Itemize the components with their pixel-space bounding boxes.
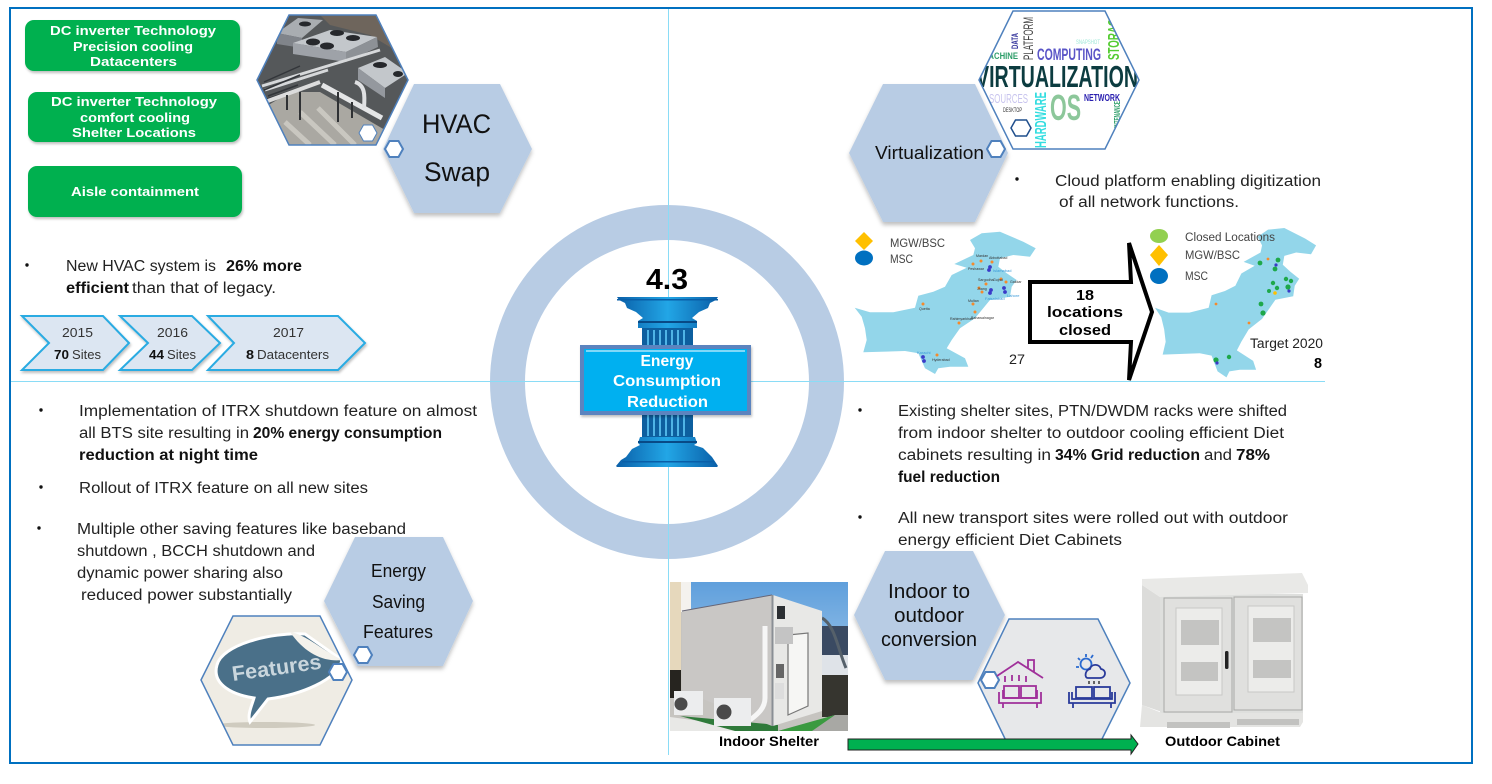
target 2020 count: Target 2020 (1250, 336, 1323, 351)
hexagon: Energy Saving Features: Saving (372, 592, 425, 612)
pillar label box: Reduction (627, 394, 708, 411)
hexagon: Indoor to outdoor conversion (854, 551, 1005, 680)
map: current 27 locations: Jhang (977, 287, 987, 291)
hexagon: Indoor to outdoor conversion: Indoor to (888, 581, 970, 603)
photo: indoor shelter (670, 582, 848, 731)
hexagon: Indoor to outdoor conversion: outdoor (894, 605, 964, 627)
chevron 2016: 2016 (157, 325, 188, 340)
panel: virtualization (849, 11, 1323, 380)
arrow: 18 locations closed (1030, 243, 1152, 380)
bullet: HVAC efficiency (25, 258, 302, 297)
word cloud hexagon: MACHINE (982, 51, 1018, 61)
legend: left map: MGW/BSC (890, 236, 945, 250)
map: current 27 locations (855, 232, 1036, 374)
map: current 27 locations: Bahawalnagar (971, 316, 995, 320)
map: current 27 locations: Mardan (976, 254, 988, 258)
bullet list: ITRX features: reduction at night time (79, 447, 258, 464)
pillar label box: Consumption (613, 373, 721, 390)
pillar label box: Energy (640, 353, 694, 370)
chevron 2015: Sites (72, 347, 101, 362)
map: current 27 locations: Multan (968, 299, 979, 303)
bullet list: ITRX features: Multiple other saving features like baseband (77, 521, 406, 538)
hexagon: Virtualization (849, 84, 1008, 222)
green box: precision cooling: Precision cooling (73, 39, 193, 54)
word cloud hexagon: DATA (1010, 33, 1020, 49)
bullet list: ITRX features: Rollout of ITRX feature on all new sites (79, 480, 368, 497)
panel: indoor to outdoor conversion (670, 403, 1308, 754)
green box: precision cooling: Datacenters (90, 54, 177, 69)
map: current 27 locations: Abbottabad (989, 256, 1007, 260)
map: target 8 locations (1155, 228, 1316, 377)
bullet list: ITRX features: shutdown , BCCH shutdown and (77, 543, 315, 560)
green box: comfort cooling (28, 92, 240, 142)
arrow: shelter to cabinet (848, 735, 1138, 754)
target 2020 count: 8 (1314, 355, 1322, 372)
word cloud hexagon: NETWORK (1084, 93, 1121, 104)
hexagon: HVAC Swap: HVAC (422, 109, 491, 139)
bullet list: ITRX features: 20% energy consumption (253, 425, 442, 442)
chevron 2015 (22, 316, 129, 370)
chevron 2017 (208, 316, 365, 370)
word cloud hexagon: SNAPSHOT (1076, 40, 1100, 46)
green box: precision cooling (25, 20, 240, 71)
bullet list: Diet cabinets: and (1204, 447, 1232, 464)
legend: right map: MGW/BSC (1185, 248, 1240, 262)
green box: comfort cooling: Shelter Locations (72, 125, 196, 140)
pillar label box (582, 347, 749, 413)
map: current 27 locations: Hyderabad (932, 358, 950, 362)
bullet: HVAC efficiency: 26% more (226, 258, 302, 275)
bullet list: Diet cabinets: fuel reduction (898, 469, 1000, 486)
panel: HVAC swap (22, 15, 532, 370)
bullet list: ITRX features: reduced power substantially (81, 587, 292, 604)
central ring (508, 222, 826, 542)
legend: left map: MSC (890, 252, 913, 266)
photo hexagon: HVAC plant (257, 15, 408, 145)
bullet list: Diet cabinets: cabinets resulting in (898, 447, 1051, 464)
green box: comfort cooling: comfort cooling (80, 110, 190, 125)
bullet list: Diet cabinets: 34% Grid reduction (1055, 447, 1200, 464)
map: current 27 locations: Rahimyarkhan (950, 317, 973, 321)
legend: right map (1150, 229, 1275, 284)
bullet list: Diet cabinets: 78% (1236, 447, 1270, 464)
legend: right map: MSC (1185, 269, 1208, 283)
map: current 27 locations: Lahore (1007, 293, 1020, 298)
bullet list: Diet cabinets (858, 403, 1288, 549)
map: current 27 locations: Karachi (917, 350, 931, 355)
bullet list: ITRX features (37, 403, 478, 604)
photo: outdoor cabinet (1140, 573, 1308, 728)
map: current 27 locations: Faisalabad (985, 296, 1005, 301)
photo hexagon: features speech bubble (201, 616, 352, 745)
map: current 27 locations: Gakkar (1010, 280, 1022, 284)
hexagon: HVAC Swap (383, 84, 532, 213)
green box: comfort cooling: DC inverter Technology (51, 94, 218, 109)
word cloud hexagon: DESKTOP (1003, 108, 1022, 114)
bullet: HVAC efficiency: than that of legacy. (132, 280, 276, 297)
bullet: HVAC efficiency: New HVAC system is (66, 258, 216, 275)
bullet: cloud platform: of all network functions. (1059, 194, 1239, 211)
green box: precision cooling: DC inverter Technology (50, 23, 217, 38)
arrow: 18 locations closed: closed (1059, 322, 1111, 339)
word cloud hexagon: COMPUTING (1037, 45, 1101, 64)
pillar column (616, 297, 718, 467)
chevron 2016: 44 (149, 347, 165, 362)
map: current 27 locations: Peshawar (968, 267, 985, 271)
word cloud hexagon: SOURCES (989, 91, 1028, 106)
hexagon: Energy Saving Features (324, 537, 473, 666)
icon: house with sofa (997, 660, 1043, 708)
value 4.3: 4.3 (646, 264, 688, 296)
bullet list: Diet cabinets: All new transport sites were rolled out with outdoor (898, 510, 1288, 527)
chevron 2016 (120, 316, 220, 370)
green box: aisle containment (28, 166, 242, 217)
icon: sun, cloud and sofa (1069, 654, 1115, 708)
green box: aisle containment: Aisle containment (71, 184, 200, 199)
chevron 2015: 2015 (62, 325, 93, 340)
label: Indoor Shelter: Indoor Shelter (719, 734, 820, 749)
arrow: 18 locations closed: 18 (1076, 287, 1094, 304)
word cloud hexagon: HARDWARE (1033, 92, 1050, 148)
bullet list: Diet cabinets: energy efficient Diet Cabinets (898, 532, 1122, 549)
panel: energy saving features (37, 403, 478, 745)
chevron 2017: 2017 (273, 325, 304, 340)
map: current 27 locations: Quetta (919, 307, 930, 311)
word cloud hexagon (976, 11, 1139, 149)
map: current 27 locations: Gujrat (993, 278, 1003, 282)
hexagon: Indoor to outdoor conversion: conversion (881, 629, 977, 651)
center pillar with energy consumption reduction (582, 264, 749, 467)
count 27: 27 (1009, 351, 1025, 367)
bullet list: Diet cabinets: Existing shelter sites, PTN/DWDM racks were shifted (898, 403, 1287, 420)
icon hexagon: indoor and outdoor sofas (978, 619, 1130, 747)
word cloud hexagon: VIRTUALIZATION (976, 59, 1138, 94)
bullet: cloud platform: Cloud platform enabling digitization (1055, 173, 1321, 190)
word cloud hexagon: MAINTENANCE (1113, 101, 1122, 135)
chevron 2015: 70 (54, 347, 69, 362)
chevron 2017: Datacenters (257, 347, 330, 362)
hexagon: HVAC Swap: Swap (424, 157, 490, 187)
map: current 27 locations: Islamabad (993, 268, 1011, 273)
target 2020 count (1250, 336, 1323, 372)
bullet list: ITRX features: dynamic power sharing also (77, 565, 283, 582)
hexagon: Energy Saving Features: Features (363, 622, 433, 642)
bullet list: ITRX features: all BTS site resulting in (79, 425, 249, 442)
word cloud hexagon: OS (1050, 87, 1081, 128)
photo hexagon: features speech bubble: Features (230, 651, 323, 686)
bullet list: Diet cabinets: from indoor shelter to outdoor cooling efficient Diet (898, 425, 1285, 442)
bullet list: ITRX features: Implementation of ITRX shutdown feature on almost (79, 403, 478, 420)
chevron 2017: 8 (246, 347, 254, 362)
legend: right map: Closed Locations (1185, 232, 1275, 244)
hexagon: Energy Saving Features: Energy (371, 561, 426, 581)
label: Outdoor Cabinet: Outdoor Cabinet (1165, 734, 1281, 749)
chevron timeline (22, 316, 365, 370)
bullet: HVAC efficiency: efficient (66, 280, 129, 297)
bullet: cloud platform (1015, 173, 1321, 211)
arrow: 18 locations closed: locations (1047, 304, 1123, 321)
map: current 27 locations: Sargodha (978, 278, 994, 282)
chevron 2016: Sites (167, 347, 196, 362)
hexagon: Virtualization: Virtualization (875, 143, 984, 163)
legend: left map (855, 232, 945, 266)
